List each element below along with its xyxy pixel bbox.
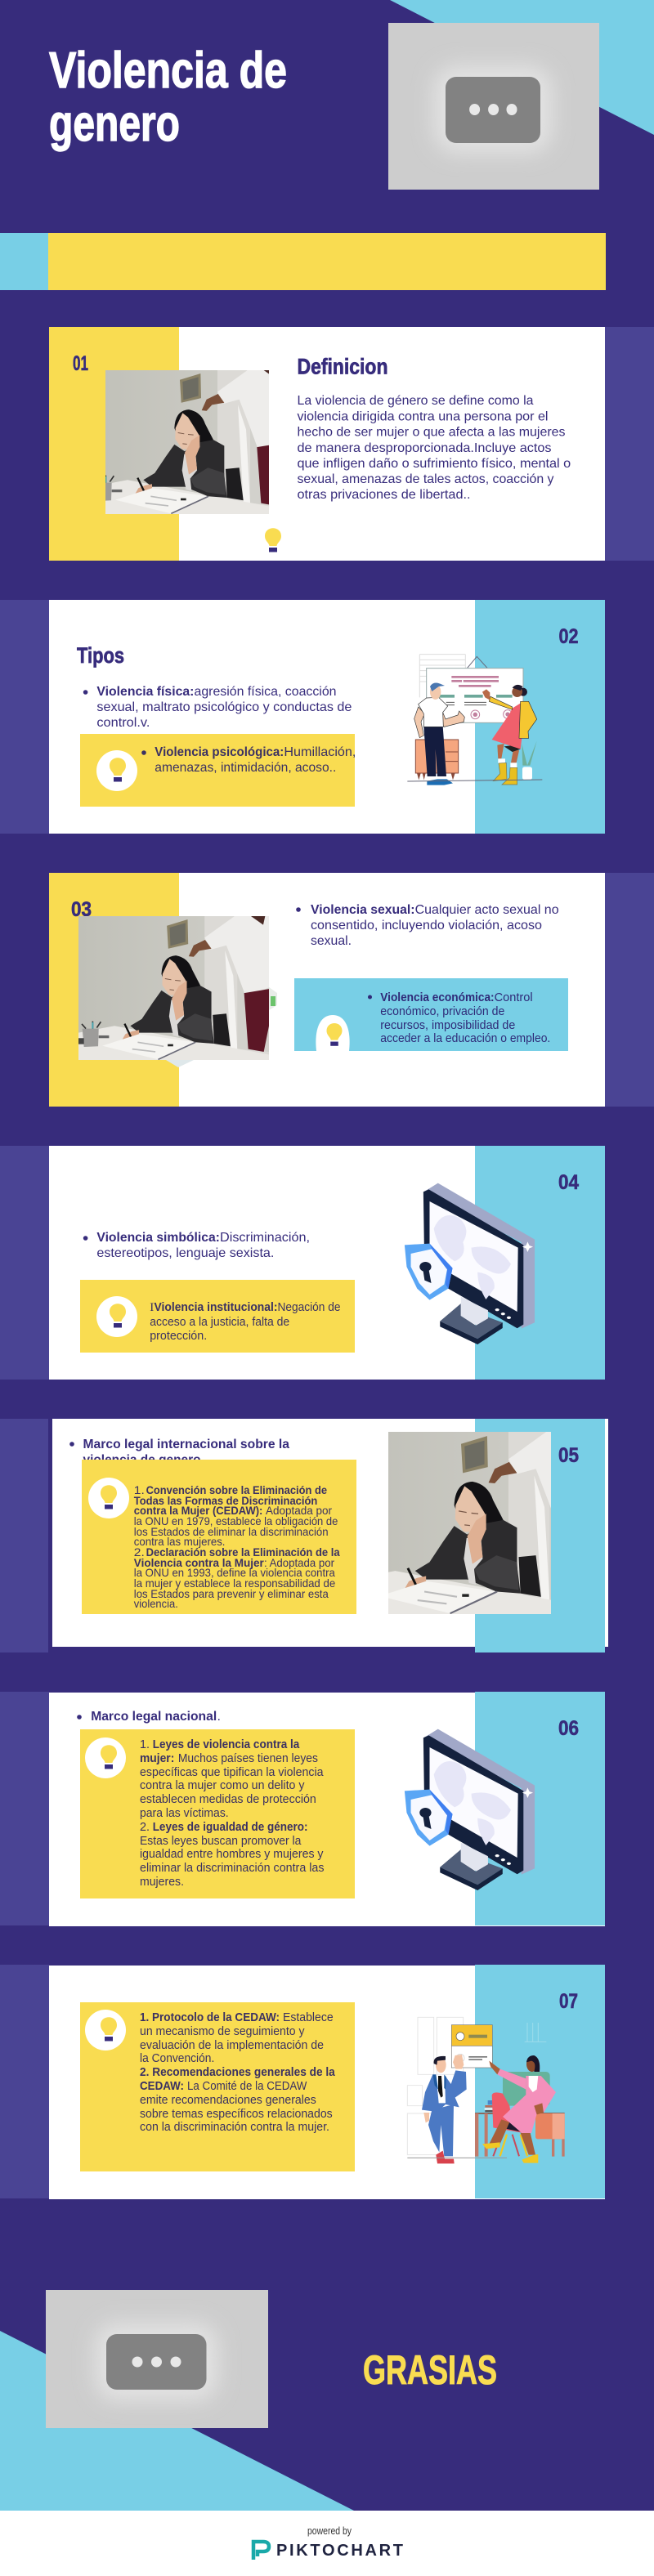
- callout: tratados internacionales: 1.: [134, 1483, 145, 1496]
- callout: violencia psicologica: [80, 734, 356, 807]
- callout: tratados internacionales: la ONU en 1979, establece la obligación de: [134, 1514, 338, 1527]
- number 02: 02: [559, 625, 579, 648]
- callout: tratados internacionales: Todas las Formas de Discriminación: [134, 1494, 317, 1507]
- definition paragraph: otras privaciones de libertad..: [298, 488, 471, 502]
- bullet: violencia simbolica: Discriminación,: [220, 1231, 310, 1245]
- definition paragraph: de manera desproporcionada.Incluye actos: [298, 441, 551, 455]
- heading: tipos: Tipos: [77, 643, 124, 668]
- header: title banner: [49, 0, 654, 190]
- callout: protocolo y recomendaciones: [80, 2002, 355, 2171]
- definition paragraph: violencia dirigida contra una persona por el: [298, 409, 548, 423]
- callout: leyes nacionales: contra la mujer como un delito y: [140, 1778, 305, 1792]
- definition paragraph: La violencia de género se define como la: [298, 394, 534, 408]
- callout: protocolo y recomendaciones: con la discriminación contra la mujer.: [140, 2120, 329, 2134]
- callout: violencia institucional: [80, 1280, 355, 1353]
- callout: protocolo y recomendaciones: un mecanismo de seguimiento y: [140, 2024, 305, 2038]
- callout: leyes nacionales: eliminar la discriminación contra las: [140, 1861, 324, 1875]
- number 07: 07: [559, 1990, 578, 2013]
- callout: violencia institucional: Violencia institucional:: [154, 1300, 278, 1314]
- callout: protocolo y recomendaciones: emite recomendaciones generales: [140, 2093, 316, 2107]
- bullet: violencia fisica: sexual, maltrato psicológico y conductas de: [96, 700, 352, 714]
- callout: tratados internacionales: violencia.: [134, 1597, 178, 1610]
- panel 05: marco legal internacional: [0, 1419, 608, 1652]
- callout: tratados internacionales: la ONU en 1993, define la violencia contra: [134, 1566, 335, 1579]
- callout: tratados internacionales: Declaración sobre la Eliminación de la: [146, 1545, 340, 1559]
- panel 02: tipos: [0, 600, 605, 834]
- powered by label: powered by: [307, 2525, 352, 2537]
- callout: violencia psicologica: amenazas, intimidación, acoso..: [155, 761, 336, 775]
- image placeholder: [46, 2290, 268, 2428]
- callout: leyes nacionales: establecen medidas de protección: [140, 1792, 316, 1806]
- callout: leyes nacionales: para las víctimas.: [140, 1806, 229, 1820]
- callout: tratados internacionales: contra las mujeres.: [134, 1535, 226, 1548]
- bullet: marco legal internacional: [69, 1438, 289, 1467]
- callout: violencia institucional: Negación de: [278, 1300, 340, 1314]
- decorative cyan corner triangle: [390, 0, 654, 135]
- photo: [105, 370, 269, 514]
- closing text: GRASIAS: [363, 2347, 497, 2393]
- image placeholder: [388, 23, 599, 190]
- illustration fragments behind photo: [166, 987, 277, 1067]
- callout: leyes nacionales: específicas que tipifican la violencia: [140, 1765, 324, 1779]
- panel 06: marco legal nacional: [0, 1692, 605, 1926]
- panel 01: definicion: [49, 327, 654, 561]
- callout: protocolo y recomendaciones: sobre temas específicos relacionados: [140, 2107, 333, 2121]
- decorative cyan triangle: [0, 2331, 354, 2511]
- callout: leyes nacionales: Muchos países tienen leyes: [178, 1751, 318, 1765]
- callout: protocolo y recomendaciones: La Comité de la CEDAW: [187, 2079, 307, 2093]
- callout: leyes nacionales: Estas leyes buscan promover la: [140, 1834, 302, 1848]
- bullet: violencia sexual: sexual.: [311, 934, 352, 948]
- bullet: marco legal internacional: Marco legal internacional sobre la: [83, 1438, 289, 1451]
- number 05: 05: [558, 1444, 579, 1467]
- yellow banner bar: [0, 233, 606, 290]
- illustration: two professionals with document: [407, 2017, 565, 2163]
- bullet: violencia simbolica: estereotipos, lenguaje sexista.: [96, 1246, 274, 1260]
- callout: protocolo y recomendaciones: 1. Protocolo de la CEDAW:: [140, 2010, 280, 2024]
- number 01: 01: [73, 352, 88, 375]
- bullet: violencia simbolica: [83, 1231, 310, 1260]
- callout: tratados internacionales: [82, 1460, 356, 1614]
- callout: leyes nacionales: Leyes de violencia contra la: [153, 1737, 300, 1751]
- illustration: two people at a board: [407, 655, 542, 785]
- bullet: violencia sexual: consentido, incluyendo violación, acoso: [311, 919, 542, 932]
- panel 07: protocolo CEDAW: [0, 1965, 605, 2199]
- bullet: marco legal internacional: violencia de genero: [83, 1453, 201, 1467]
- callout: violencia economica: acceder a la educación o empleo.: [380, 1031, 550, 1045]
- callout: violencia economica: económico, privación de: [380, 1004, 504, 1018]
- definition paragraph: que infligen daño o sufrimiento físico, mental o: [298, 457, 571, 471]
- callout: violencia institucional: acceso a la justicia, falta de: [150, 1315, 289, 1329]
- piktochart footer: [0, 2511, 654, 2576]
- bullet: violencia fisica: [83, 685, 352, 730]
- callout: violencia institucional: I: [150, 1301, 154, 1314]
- photo: [388, 1432, 551, 1614]
- bullet: marco legal nacional: .: [217, 1710, 221, 1724]
- panel 03: violencia sexual y economica: [49, 873, 654, 1107]
- callout: leyes nacionales: 2.: [140, 1820, 150, 1834]
- callout: tratados internacionales: la mujer y establece la responsabilidad de: [134, 1576, 335, 1590]
- footer banner: closing: [0, 2290, 497, 2511]
- callout: protocolo y recomendaciones: la Convención.: [140, 2051, 214, 2065]
- number 04: 04: [558, 1171, 579, 1194]
- callout: tratados internacionales: Adoptada por: [266, 1504, 332, 1517]
- callout: violencia institucional: protección.: [150, 1329, 207, 1343]
- callout: violencia economica: Violencia económica:: [380, 991, 495, 1004]
- illustration: monitor with shield: [405, 1729, 535, 1890]
- bullet: violencia sexual: [296, 903, 559, 948]
- callout: violencia psicologica: Humillación,: [284, 745, 356, 759]
- callout: tratados internacionales: los Estados de eliminar la discriminación: [134, 1525, 329, 1538]
- bullet: violencia simbolica: Violencia simbólica:: [96, 1231, 220, 1245]
- bullet: violencia sexual: Cualquier acto sexual no: [415, 903, 559, 917]
- callout: leyes nacionales: [80, 1729, 355, 1898]
- bullet: violencia sexual: Violencia sexual:: [311, 903, 415, 917]
- callout: violencia psicologica: Violencia psicológica:: [155, 745, 284, 759]
- callout: tratados internacionales: contra la Mujer (CEDAW):: [134, 1504, 262, 1517]
- icon: light bulb: [265, 528, 281, 552]
- definition paragraph: [298, 394, 571, 502]
- title: genero: [49, 96, 180, 152]
- bullet: marco legal nacional: Marco legal nacional: [91, 1710, 217, 1724]
- definition paragraph: sexual, amenazas de tales actos, coacción y: [298, 472, 554, 486]
- callout: tratados internacionales: Violencia contra la Mujer: [134, 1556, 264, 1569]
- callout: protocolo y recomendaciones: 2. Recomendaciones generales de la: [140, 2065, 335, 2079]
- piktochart logo: PIKTOCHART: [276, 2542, 403, 2560]
- bullet: violencia fisica: agresión física, coacción: [195, 685, 337, 699]
- definition paragraph: hecho de ser mujer o que afecta a las mujeres: [298, 425, 566, 440]
- callout: violencia economica: Control: [495, 991, 533, 1004]
- callout: tratados internacionales: 2.: [134, 1545, 145, 1559]
- number 06: 06: [558, 1717, 579, 1740]
- bullet: violencia fisica: control.v.: [96, 716, 150, 730]
- title: Violencia de: [49, 42, 287, 99]
- title: [49, 42, 287, 152]
- callout: tratados internacionales: los Estados para prevenir y eliminar esta: [134, 1587, 329, 1600]
- callout: leyes nacionales: mujer:: [140, 1751, 174, 1765]
- callout: leyes nacionales: igualdad entre hombres y mujeres y: [140, 1847, 324, 1861]
- callout: protocolo y recomendaciones: Establece: [283, 2010, 334, 2024]
- callout: leyes nacionales: mujeres.: [140, 1875, 184, 1889]
- callout: protocolo y recomendaciones: evaluación de la implementación de: [140, 2038, 324, 2052]
- callout: leyes nacionales: 1.: [140, 1737, 150, 1751]
- number 03: 03: [71, 898, 92, 921]
- callout: leyes nacionales: Leyes de igualdad de género:: [153, 1820, 307, 1834]
- photo: [78, 916, 269, 1060]
- illustration: monitor with shield: [405, 1183, 535, 1344]
- callout: tratados internacionales: Convención sobre la Eliminación de: [146, 1483, 327, 1496]
- callout: violencia economica: [294, 978, 568, 1051]
- callout: tratados internacionales: : Adoptada por: [264, 1556, 334, 1569]
- callout: protocolo y recomendaciones: CEDAW:: [140, 2079, 184, 2093]
- callout: violencia economica: recursos, imposibilidad de: [380, 1018, 515, 1032]
- heading: definicion: Definicion: [298, 355, 387, 379]
- bullet: violencia fisica: Violencia física:: [96, 685, 194, 699]
- panel 04: violencia simbolica e institucional: [0, 1146, 605, 1380]
